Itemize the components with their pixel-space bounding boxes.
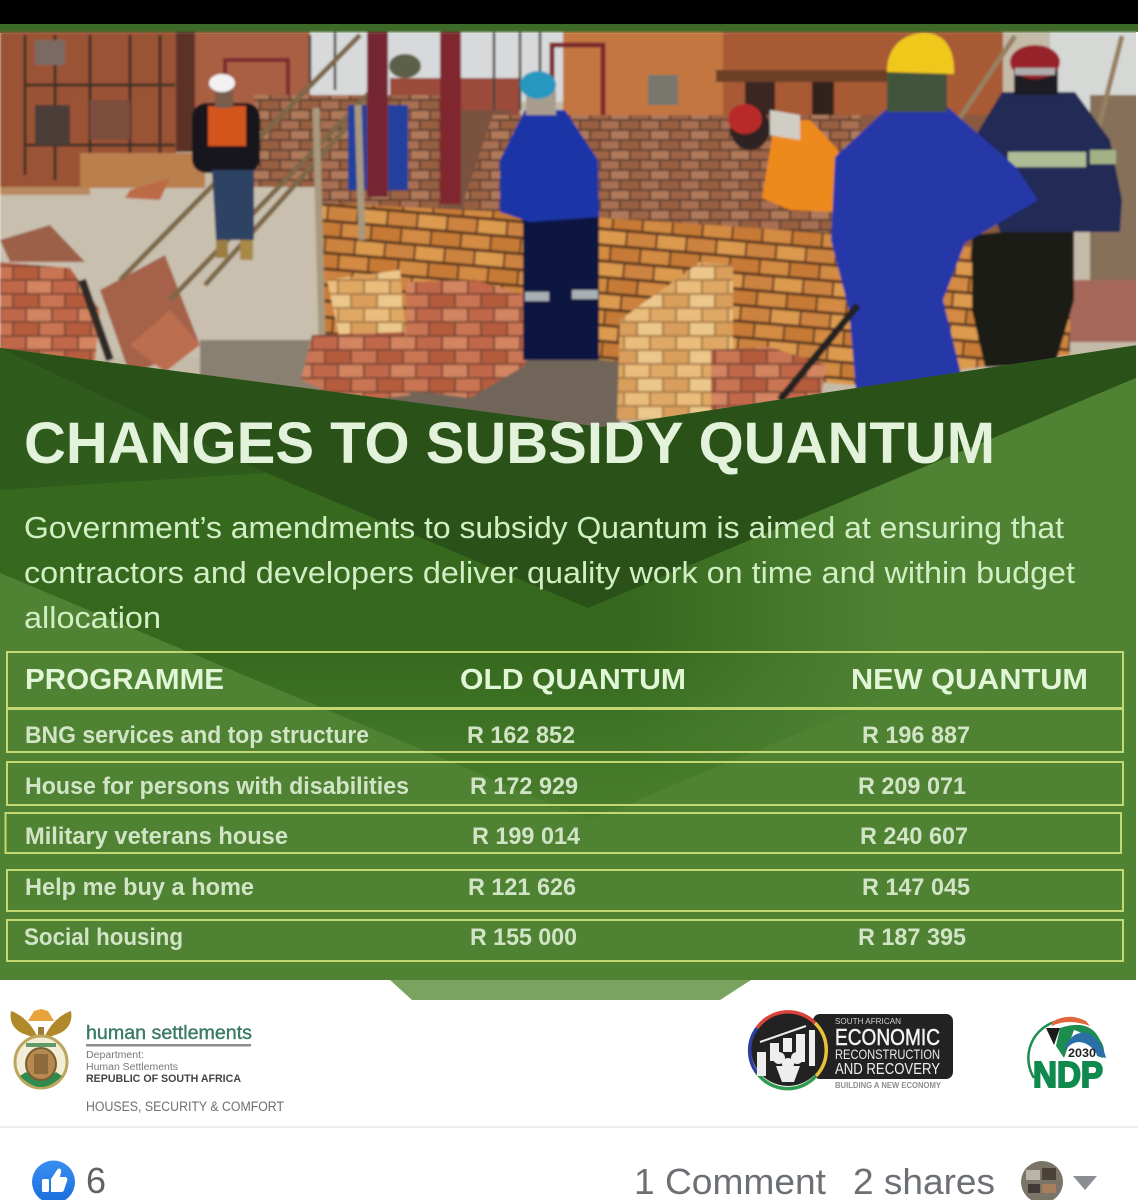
row: Military veterans house: Military veterans house bbox=[25, 823, 288, 850]
logo: economic reconstruction and recovery: ECONOMIC bbox=[835, 1024, 940, 1050]
row: BNG services and top structure: R 196 887 bbox=[862, 722, 970, 749]
row: House for persons with disabilities: R 209 071 bbox=[858, 773, 966, 800]
fade of the chevron to the right bbox=[588, 377, 1138, 820]
logo text: human settlements: Department: bbox=[86, 1050, 144, 1061]
table row boxes bbox=[6, 652, 1123, 961]
row: Social housing: R 155 000 bbox=[470, 924, 577, 951]
footer divider bbox=[0, 1126, 1138, 1128]
row: House for persons with disabilities bbox=[25, 773, 966, 800]
logo: NDP 2030: 2030 bbox=[1068, 1048, 1096, 1060]
slogan: HOUSES, SECURITY & COMFORT bbox=[86, 1099, 284, 1114]
logo: economic reconstruction and recovery: SOUTH AFRICAN bbox=[835, 1016, 901, 1026]
logo: NDP 2030: NDP bbox=[1033, 1054, 1103, 1095]
row: BNG services and top structure bbox=[25, 722, 970, 749]
row: Social housing bbox=[24, 924, 966, 951]
avatar bbox=[1021, 1161, 1063, 1200]
intro text: allocation bbox=[24, 600, 161, 635]
photo: bricklayers building a house bbox=[0, 32, 1138, 432]
row: House for persons with disabilities: House for persons with disabilities bbox=[25, 773, 409, 800]
row: Help me buy a home bbox=[25, 874, 970, 901]
logo: economic reconstruction and recovery: RECONSTRUCTION bbox=[835, 1046, 940, 1062]
row: Social housing: Social housing bbox=[24, 924, 183, 951]
right edge white strip bbox=[1136, 32, 1138, 982]
mid-green chevron bbox=[0, 345, 1138, 820]
row: House for persons with disabilities: R 172 929 bbox=[470, 773, 578, 800]
table: subsidy quantum by programme bbox=[6, 652, 1123, 961]
logo: NDP 2030 bbox=[1028, 1017, 1106, 1095]
logo: economic reconstruction and recovery bbox=[750, 1012, 953, 1090]
row: Help me buy a home: R 121 626 bbox=[468, 874, 576, 901]
icon: like bbox=[32, 1160, 75, 1200]
green strip under the top bar bbox=[0, 24, 1138, 33]
darkest chevron bbox=[0, 345, 1138, 608]
logo text: human settlements: Human Settlements bbox=[86, 1062, 178, 1073]
row: Military veterans house bbox=[25, 823, 968, 850]
dark upper-left wedge bbox=[0, 348, 265, 490]
row: Help me buy a home: Help me buy a home bbox=[25, 874, 254, 901]
like count: 6 bbox=[86, 1160, 106, 1200]
intro text bbox=[24, 510, 1075, 635]
logo text: human settlements: human settlements bbox=[86, 1023, 252, 1044]
intro text: Government’s amendments to subsidy Quantum is aimed at ensuring that bbox=[24, 510, 1064, 545]
top black bar bbox=[0, 0, 1138, 25]
row: Help me buy a home: R 147 045 bbox=[862, 874, 970, 901]
icon: dropdown caret bbox=[1073, 1176, 1097, 1190]
table header row bbox=[25, 664, 1088, 696]
row: BNG services and top structure: R 162 852 bbox=[467, 722, 575, 749]
intro text: contractors and developers deliver quality work on time and within budget bbox=[24, 555, 1075, 590]
logo bars and figures bbox=[757, 1026, 815, 1082]
row: Military veterans house: R 199 014 bbox=[472, 823, 581, 850]
logo ring bbox=[750, 1012, 826, 1089]
logo: economic reconstruction and recovery: BUILDING A NEW ECONOMY bbox=[835, 1081, 942, 1090]
table header row: PROGRAMME bbox=[25, 664, 224, 696]
row: Military veterans house: R 240 607 bbox=[860, 823, 968, 850]
table header row: OLD QUANTUM bbox=[460, 664, 686, 696]
row: Social housing: R 187 395 bbox=[858, 924, 966, 951]
green background panel bbox=[0, 345, 1138, 980]
logo text: human settlements: REPUBLIC OF SOUTH AFRICA bbox=[86, 1073, 241, 1085]
logo text: human settlements bbox=[86, 1023, 252, 1085]
logo: economic reconstruction and recovery: AND RECOVERY bbox=[835, 1061, 940, 1078]
logo: coat of arms bbox=[11, 1009, 71, 1088]
footer tab bbox=[390, 980, 751, 1000]
table header row: NEW QUANTUM bbox=[851, 664, 1088, 696]
row: BNG services and top structure: BNG services and top structure bbox=[25, 722, 369, 749]
title: CHANGES TO SUBSIDY QUANTUM bbox=[24, 411, 995, 476]
